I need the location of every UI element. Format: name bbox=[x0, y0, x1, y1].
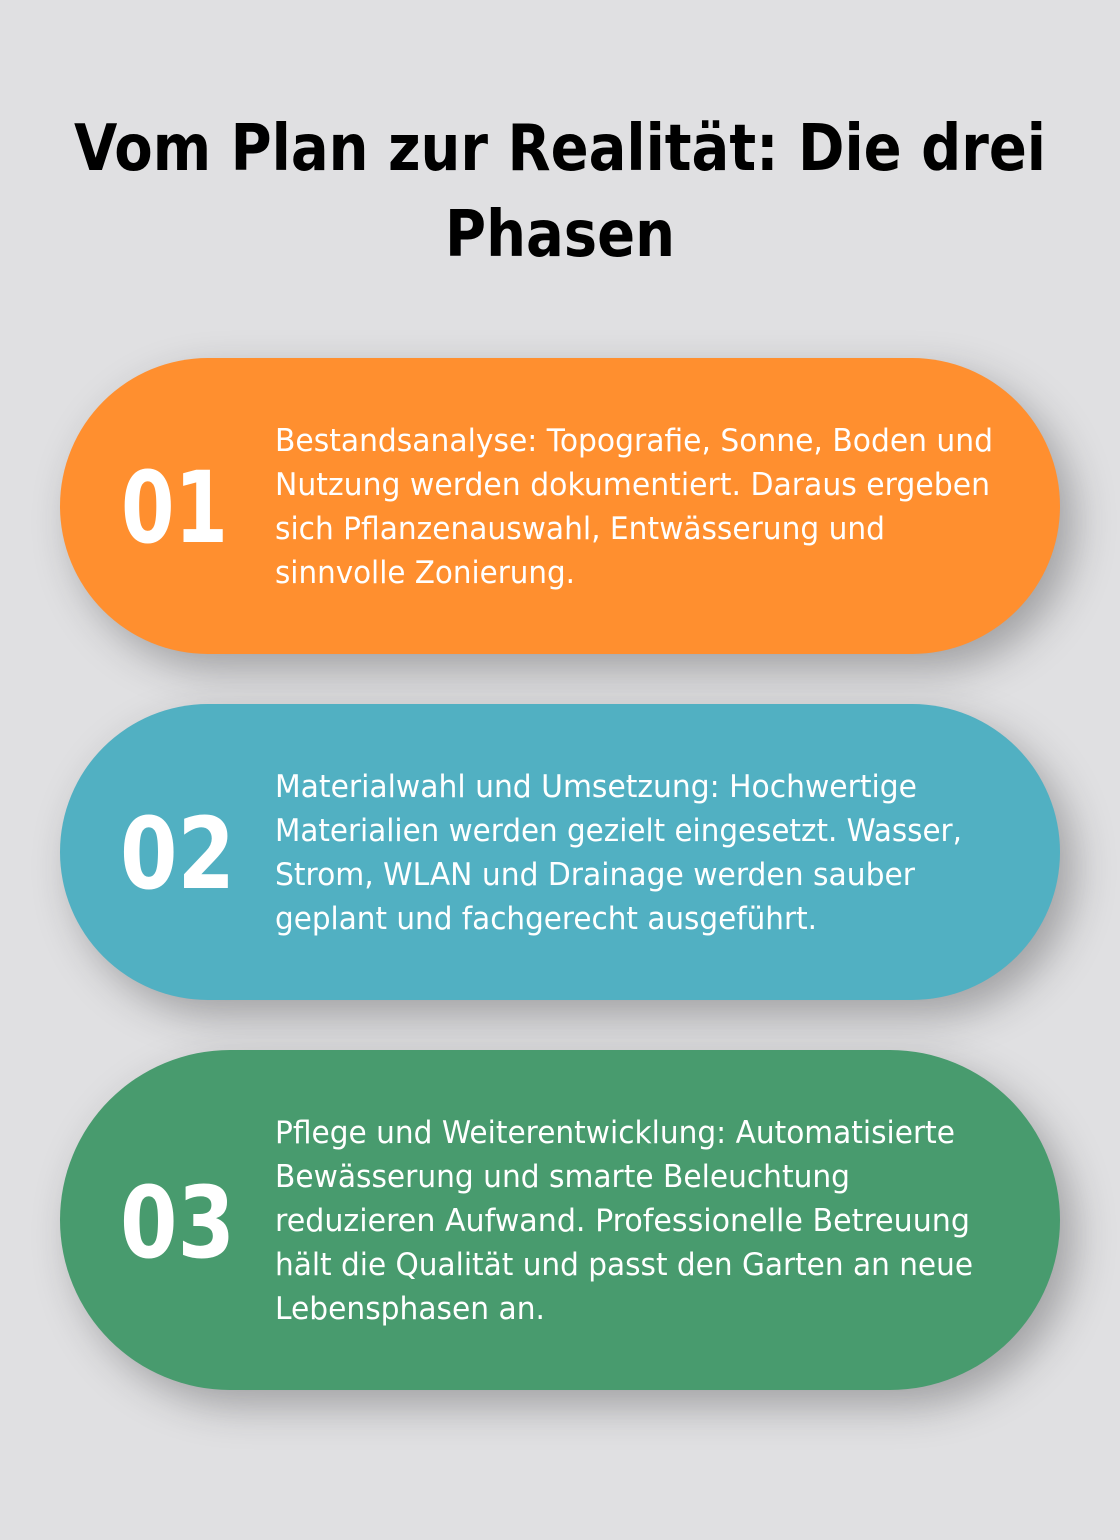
text: phase 02 description bbox=[275, 769, 962, 937]
number 01: 01 bbox=[121, 451, 228, 566]
text: phase 03 description: reduzieren Aufwand. Professionelle Betreuung bbox=[275, 1203, 970, 1239]
text: phase 03 description: Bewässerung und smarte Beleuchtung bbox=[275, 1159, 850, 1195]
text: phase 01 description: Nutzung werden dokumentiert. Daraus ergeben bbox=[275, 467, 990, 503]
title: Phasen bbox=[445, 198, 675, 272]
panel: phase 01 bbox=[60, 358, 1060, 654]
text: phase 02 description: Strom, WLAN und Drainage werden sauber bbox=[275, 857, 915, 893]
number 03: 03 bbox=[120, 1166, 235, 1281]
panel: phase 02 bbox=[60, 704, 1060, 1000]
text: phase 01 description: sich Pflanzenauswahl, Entwässerung und bbox=[275, 511, 885, 547]
text: phase 03 description: Pflege und Weiterentwicklung: Automatisierte bbox=[275, 1115, 955, 1151]
text: phase 03 description bbox=[275, 1115, 973, 1327]
text: phase 03 description: Lebensphasen an. bbox=[275, 1291, 545, 1327]
text: phase 01 description bbox=[275, 423, 993, 591]
text: phase 03 description: hält die Qualität und passt den Garten an neue bbox=[275, 1247, 973, 1283]
panel: phase 03 bbox=[60, 1050, 1060, 1390]
text: phase 02 description: Materialwahl und Umsetzung: Hochwertige bbox=[275, 769, 917, 805]
text: phase 01 description: sinnvolle Zonierung. bbox=[275, 555, 575, 591]
text: phase 02 description: Materialien werden gezielt eingesetzt. Wasser, bbox=[275, 813, 962, 849]
title bbox=[74, 112, 1046, 272]
number 02: 02 bbox=[120, 797, 235, 912]
text: phase 02 description: geplant und fachgerecht ausgeführt. bbox=[275, 901, 817, 937]
text: phase 01 description: Bestandsanalyse: Topografie, Sonne, Boden und bbox=[275, 423, 993, 459]
